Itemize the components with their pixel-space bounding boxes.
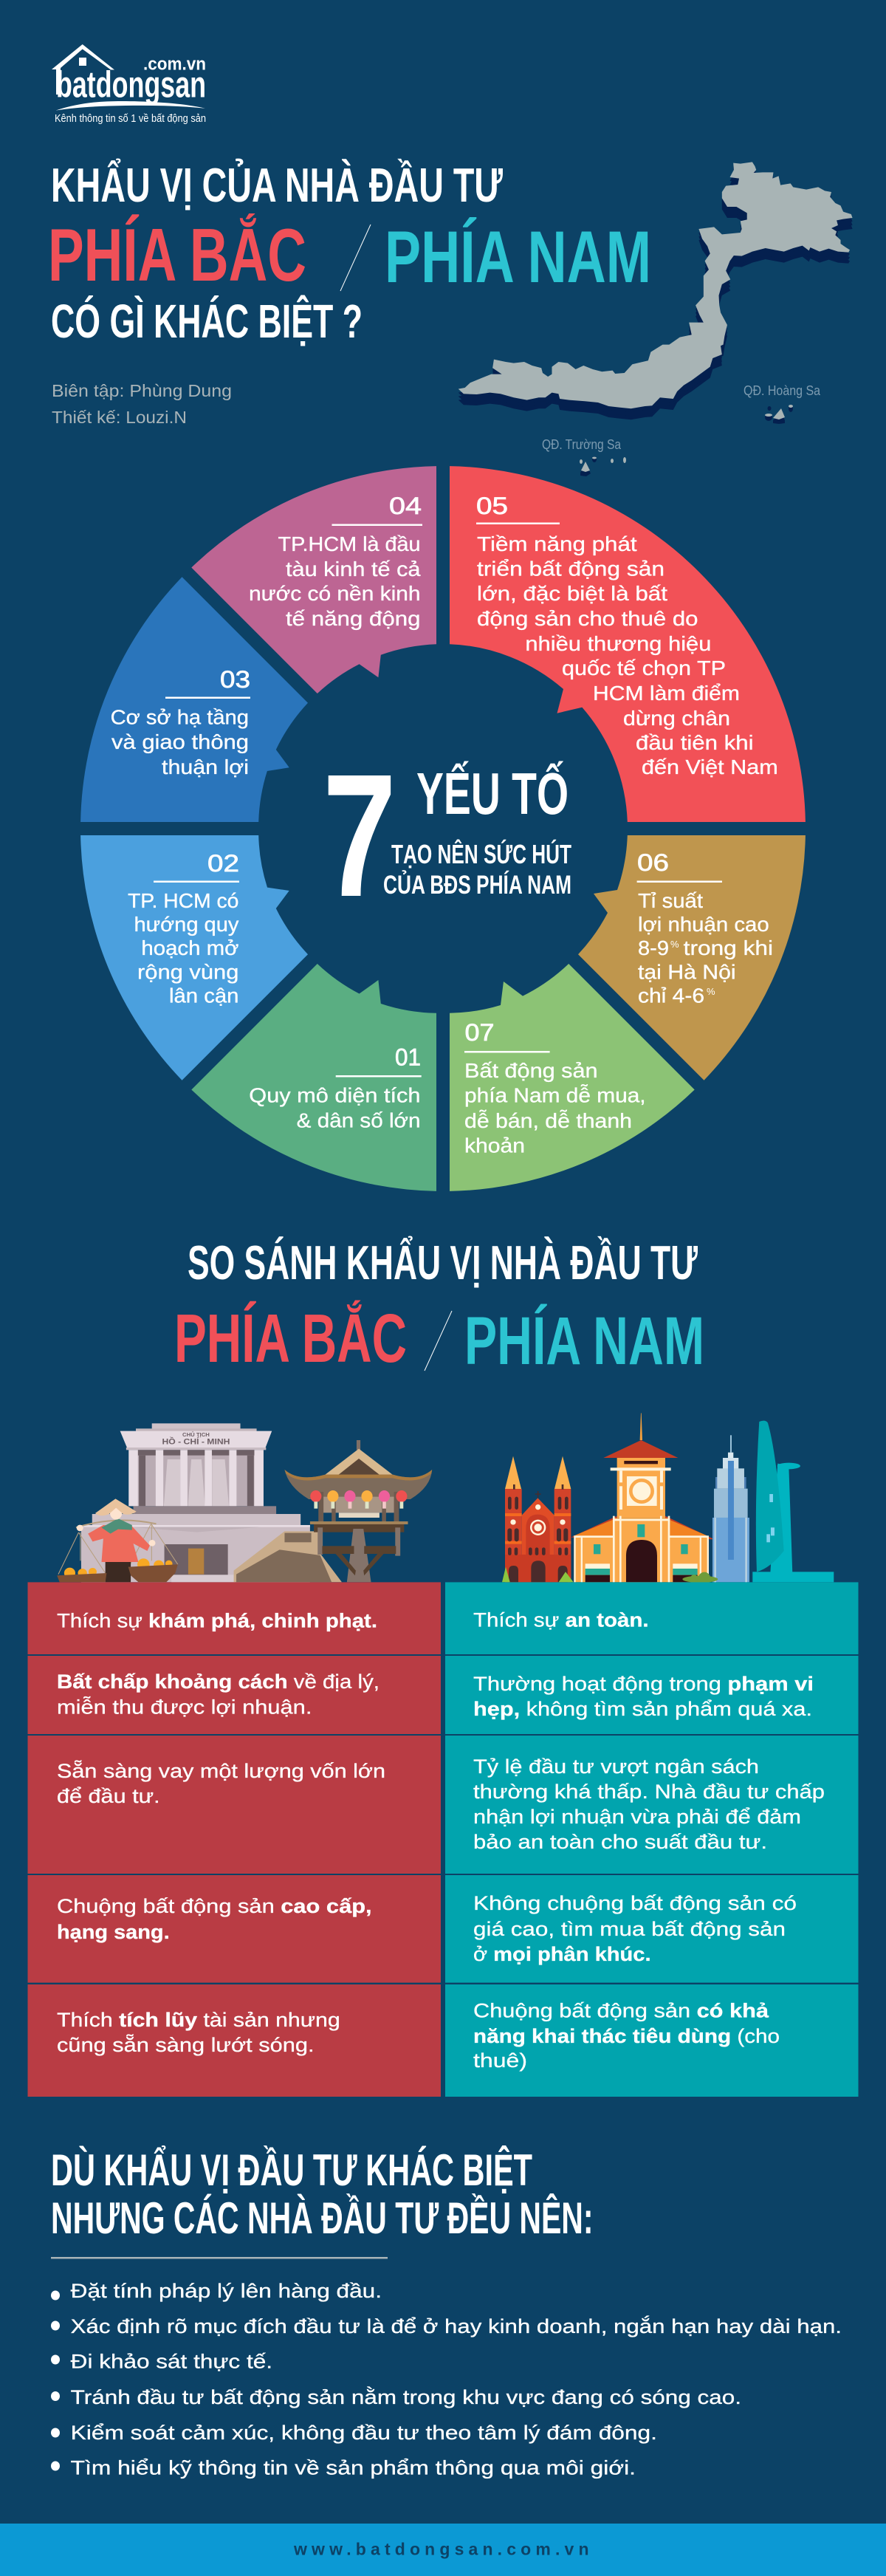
credits	[52, 381, 232, 427]
panel: northern column: Chuộng bất động sản cao cấp,	[57, 1895, 372, 1917]
bush	[682, 1572, 718, 1584]
title line 1: KHẨU VỊ CỦA NHÀ ĐẦU TƯ	[51, 158, 503, 212]
panel: segment 06: lợi nhuận cao	[638, 913, 769, 936]
comparison table	[28, 1582, 858, 2097]
panel: segment 02: lân cận	[169, 984, 238, 1007]
mausoleum	[81, 1423, 342, 1582]
panel: northern column: miễn thu được lợi nhuận.	[57, 1696, 312, 1718]
Ben Thanh market	[571, 1413, 715, 1582]
panel: southern column: Không chuộng bất động sản có	[473, 1892, 797, 1914]
panel: southern column: nhận lợi nhuận vừa phải để đảm	[473, 1806, 801, 1828]
panel: southern column: năng khai thác tiêu dùng (cho	[473, 2025, 780, 2047]
panel: seven factors wheel	[80, 466, 806, 1191]
panel: southern column: Thích sự an toàn.	[473, 1609, 649, 1631]
center heading: 7 yếu tố: CỦA BĐS PHÍA NAM	[383, 870, 571, 900]
panel: southern column	[445, 1582, 858, 2097]
panel: segment 01: 01	[395, 1044, 421, 1071]
panel: segment 03: Cơ sở hạ tầng	[111, 706, 249, 729]
footer bar: www.batdongsan.com.vn	[293, 2539, 589, 2558]
panel: segment 02: hướng quy	[134, 913, 238, 936]
panel: segment 05: Tiềm năng phát	[477, 532, 637, 555]
heading: phía Bắc: PHÍA BẮC	[174, 1300, 407, 1377]
panel: segment 05: nhiều thương hiệu	[525, 632, 711, 655]
item 1: Đặt tính pháp lý lên hàng đầu.	[71, 2280, 382, 2302]
panel: segment 06: %	[707, 986, 715, 997]
item 4: Tránh đầu tư bất động sản nằm trong khu vực đang có sóng cao.	[71, 2385, 741, 2408]
center heading: 7 yếu tố: TẠO NÊN SỨC HÚT	[391, 838, 571, 869]
panel: segment 06: trong khi	[684, 936, 773, 959]
item 6: Tìm hiểu kỹ thông tin về sản phẩm thông qua môi giới.	[71, 2457, 636, 2479]
panel: northern column: để đầu tư.	[57, 1785, 160, 1807]
panel: northern column	[28, 1582, 441, 2097]
panel: segment 06	[578, 835, 806, 1080]
panel: segment 06: 8-9	[638, 936, 669, 959]
mausoleum: HỒ - CHÍ - MINH	[162, 1437, 230, 1447]
panel: segment 04: tàu kinh tế cả	[286, 558, 421, 580]
item 5: Kiểm soát cảm xúc, không đầu tư theo tâm lý đám đông.	[71, 2422, 657, 2444]
panel: southern column: Chuộng bất động sản có khả	[473, 2000, 769, 2022]
panel: segment 02: hoạch mở	[141, 936, 238, 959]
panel: segment 07: Bất động sản	[464, 1059, 598, 1082]
advice heading: NHƯNG CÁC NHÀ ĐẦU TƯ ĐỀU NÊN:	[51, 2193, 594, 2243]
panel: segment 05	[450, 466, 806, 822]
panel: segment 07: phía Nam dễ mua,	[464, 1084, 646, 1106]
panel: segment 01: & dân số lớn	[297, 1109, 421, 1131]
panel: segment 06: %	[670, 939, 679, 950]
illustration: southern landmarks	[502, 1413, 834, 1584]
mausoleum: CHỦ TỊCH	[182, 1431, 210, 1438]
panel: segment 07: dễ bán, dễ thanh	[464, 1109, 632, 1132]
panel: segment 04	[191, 466, 436, 693]
panel: northern column: cũng sẵn sàng lướt sóng.	[57, 2033, 315, 2056]
panel: segment 02: TP. HCM có	[128, 889, 238, 912]
label: QĐ. Trường Sa: QĐ. Trường Sa	[542, 437, 622, 452]
panel: segment 01: Quy mô diện tích	[249, 1084, 421, 1106]
panel: northern column: hạng sang.	[57, 1921, 170, 1943]
panel: segment 02: rộng vùng	[137, 960, 238, 984]
logo: batdongsan.com.vn: batdongsan	[56, 64, 206, 106]
panel: segment 05: lớn, đặc biệt là bất	[477, 582, 667, 605]
panel: northern column: Thích tích lũy tài sản nhưng	[57, 2009, 340, 2031]
panel: southern column: ở mọi phân khúc.	[473, 1943, 651, 1965]
title: slash divider	[340, 225, 371, 291]
panel: segment 04: tế năng động	[286, 607, 421, 630]
panel: segment 02: 02	[207, 850, 239, 877]
title: phía Nam: PHÍA NAM	[385, 216, 651, 298]
center heading: 7 yếu tố: 7	[323, 738, 396, 934]
panel: segment 01	[191, 964, 436, 1191]
advice heading: DÙ KHẨU VỊ ĐẦU TƯ KHÁC BIỆT	[51, 2145, 532, 2195]
heading: phía Nam: PHÍA NAM	[464, 1303, 704, 1379]
advice heading	[51, 2145, 594, 2258]
illustration: northern landmarks	[57, 1423, 432, 1582]
title line 3: CÓ GÌ KHÁC BIỆT ?	[51, 294, 363, 348]
Landmark tower	[712, 1435, 749, 1582]
panel: segment 05: đến Việt Nam	[642, 756, 778, 778]
logo: batdongsan.com.vn: .com.vn	[143, 54, 206, 74]
panel: segment 03	[80, 577, 308, 822]
panel: segment 05: HCM làm điểm	[593, 682, 740, 705]
panel: segment 06: 06	[637, 849, 669, 876]
panel: segment 03: 03	[220, 666, 250, 693]
panel: segment 04: TP.HCM là đầu	[278, 532, 421, 555]
panel: southern column: hẹp, không tìm sản phẩm quá xa.	[473, 1698, 812, 1720]
label: QĐ. Hoàng Sa: QĐ. Hoàng Sa	[744, 383, 821, 398]
logo: batdongsan.com.vn	[52, 44, 206, 125]
panel: segment 03: thuận lợi	[162, 756, 249, 778]
panel: segment 05: động sản cho thuê do	[477, 607, 698, 630]
panel: segment 05: 05	[476, 493, 508, 519]
icon: Trường Sa islands	[580, 456, 626, 476]
title block	[48, 158, 651, 348]
map of Vietnam	[459, 162, 853, 419]
center heading: 7 yếu tố	[323, 738, 571, 934]
one pillar pagoda	[284, 1440, 432, 1582]
title: phía Bắc: PHÍA BẮC	[48, 213, 306, 297]
panel: southern column: giá cao, tìm mua bất động sản	[473, 1918, 786, 1940]
panel: segment 02	[80, 835, 308, 1080]
logo: batdongsan.com.vn: Kênh thông tin số 1 về bất động sản	[55, 113, 206, 125]
icon: Hoàng Sa islands	[765, 405, 793, 424]
panel: northern column: Thích sự khám phá, chinh phạt.	[57, 1610, 377, 1632]
panel: segment 05: quốc tế chọn TP	[562, 657, 726, 679]
heading: slash	[425, 1311, 452, 1371]
item 2: Xác định rõ mục đích đầu tư là để ở hay kinh doanh, ngắn hạn hay dài hạn.	[71, 2315, 842, 2337]
panel: segment 06: tại Hà Nội	[638, 960, 736, 984]
panel: southern column: Tỷ lệ đầu tư vượt ngân sách	[473, 1755, 759, 1778]
panel: southern column: thuê)	[473, 2049, 527, 2072]
panel: segment 07	[450, 964, 695, 1191]
Bitexco tower	[752, 1421, 834, 1582]
item 3: Đi khảo sát thực tế.	[71, 2350, 272, 2372]
panel: southern column: Thường hoạt động trong phạm vi	[473, 1673, 814, 1695]
panel: segment 06: chỉ 4-6	[638, 984, 704, 1007]
panel: northern column: Sẵn sàng vay một lượng vốn lớn	[57, 1759, 385, 1782]
advice list	[51, 2280, 842, 2479]
panel: segment 04: 04	[389, 493, 422, 519]
footer bar	[0, 2524, 886, 2576]
center heading: 7 yếu tố: YẾU TỐ	[416, 761, 569, 826]
panel: segment 07: khoản	[464, 1134, 525, 1157]
panel: northern column: Bất chấp khoảng cách về địa lý,	[57, 1671, 380, 1693]
panel: segment 05: đầu tiên khi	[636, 731, 753, 754]
comparison heading	[174, 1236, 704, 1379]
panel: segment 07: 07	[465, 1019, 495, 1046]
panel: southern column: thường khá thấp. Nhà đầu tư chấp	[473, 1781, 825, 1803]
credits: Biên tập: Phùng Dung	[52, 381, 232, 400]
panel: southern column: bảo an toàn cho suất đầu tư.	[473, 1831, 767, 1853]
panel: segment 04: nước có nền kinh	[249, 582, 421, 605]
panel: segment 06: Tỉ suất	[638, 889, 703, 912]
panel: segment 05: triển bất động sản	[477, 557, 664, 580]
panel: segment 05: dừng chân	[623, 707, 730, 730]
street vendor	[57, 1498, 178, 1582]
panel: segment 03: và giao thông	[111, 730, 249, 753]
cathedral	[502, 1456, 574, 1582]
credits: Thiết kế: Louzi.N	[52, 408, 187, 427]
